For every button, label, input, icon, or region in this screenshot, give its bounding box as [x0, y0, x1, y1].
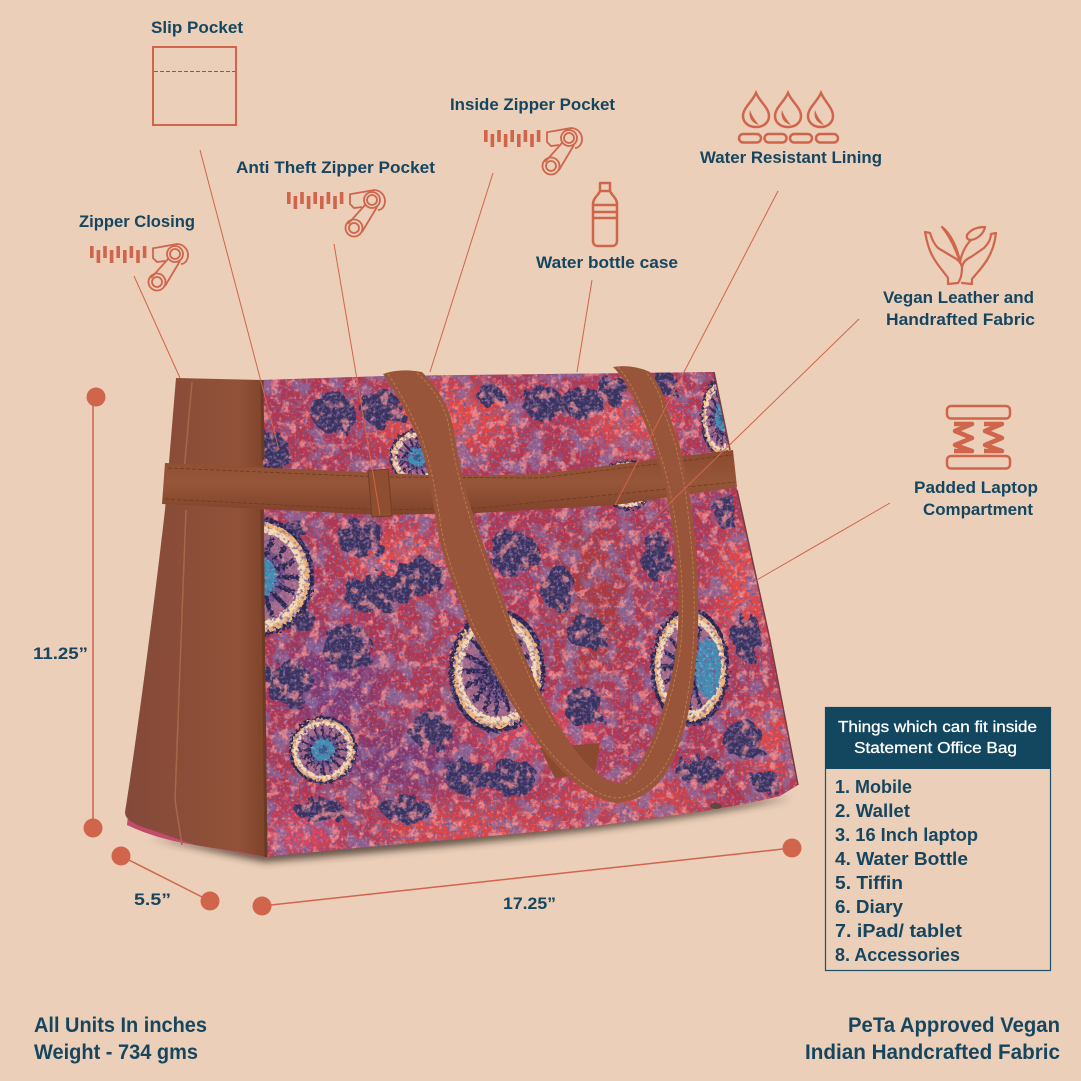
panel header [825, 707, 1051, 769]
callout: slip pocket: Slip Pocket [151, 18, 243, 37]
icon: zipper [287, 190, 385, 236]
belt band [162, 450, 737, 515]
footer: certification [805, 1014, 1060, 1064]
footer: units and weight: Weight - 734 gms [34, 1041, 198, 1064]
footer: certification: Indian Handcrafted Fabric [805, 1041, 1060, 1064]
callout: inside zipper pocket: Inside Zipper Pocket [450, 95, 615, 114]
ground shadow [150, 798, 790, 862]
pink fabric sliver at base [127, 815, 270, 858]
belt stitches [165, 455, 735, 510]
leather side panel [125, 378, 266, 857]
icon: hands and leaf [925, 227, 996, 284]
callout: vegan leather and handcrafted fabric [883, 227, 1035, 329]
callout: vegan leather and handcrafted fabric: Vegan Leather and [883, 288, 1034, 307]
leather label patch [540, 743, 600, 778]
fabric side edge [714, 372, 798, 785]
footer: units and weight: All Units In inches [34, 1014, 207, 1037]
item list: 5. Tiffin [835, 872, 903, 893]
callout: padded laptop compartment [914, 406, 1038, 519]
callout: zipper closing: Zipper Closing [79, 212, 195, 231]
icon: water drops [739, 93, 838, 142]
dimension: depth [112, 846, 220, 910]
icon: water bottle [593, 183, 617, 246]
callout: inside zipper pocket [450, 95, 615, 174]
dimension: height [33, 388, 106, 838]
mandala motifs [264, 378, 732, 786]
panel header: Things which can fit inside [838, 719, 1037, 736]
dimension: height: 11.25” [33, 644, 88, 663]
callout: slip pocket [151, 18, 243, 125]
bag photo [125, 365, 805, 865]
dimension: width [252, 838, 802, 916]
icon: slip pocket [153, 47, 236, 125]
callout: water bottle case [536, 183, 678, 272]
callout: anti theft zipper pocket: Anti Theft Zipper Pocket [236, 158, 435, 177]
strap stitching [388, 367, 694, 798]
item list [835, 776, 978, 965]
fabric front panel [262, 372, 798, 857]
callout: water bottle case: Water bottle case [536, 253, 678, 272]
item list: 2. Wallet [835, 800, 910, 821]
icon: spring padding [947, 406, 1010, 468]
side panel seams [175, 380, 266, 857]
callout: water resistant lining: Water Resistant Lining [700, 148, 882, 167]
panel header: Statement Office Bag [854, 740, 1017, 757]
footer: units and weight [34, 1014, 207, 1064]
panel: things which fit inside [825, 707, 1051, 970]
dimension: depth: 5.5” [134, 890, 171, 909]
item list: 7. iPad/ tablet [835, 920, 962, 941]
icon: zipper [484, 128, 582, 174]
leader lines [134, 150, 890, 581]
belt keeper loop [368, 469, 392, 517]
item list: 4. Water Bottle [835, 848, 968, 869]
item list: 6. Diary [835, 896, 904, 917]
item list: 3. 16 Inch laptop [835, 824, 978, 845]
dimension: width: 17.25” [503, 894, 556, 913]
item list: 8. Accessories [835, 944, 960, 965]
icon: zipper [90, 244, 188, 290]
callout: padded laptop compartment: Padded Laptop [914, 478, 1038, 497]
footer: certification: PeTa Approved Vegan [848, 1014, 1060, 1037]
metal foot [710, 803, 722, 809]
callout: vegan leather and handcrafted fabric: Handrafted Fabric [886, 310, 1035, 329]
item list: 1. Mobile [835, 776, 912, 797]
shoulder straps [383, 366, 698, 803]
callout: anti theft zipper pocket [236, 158, 435, 236]
callout: padded laptop compartment: Compartment [923, 500, 1033, 519]
callout: zipper closing [79, 212, 195, 290]
callout: water resistant lining [700, 93, 882, 167]
